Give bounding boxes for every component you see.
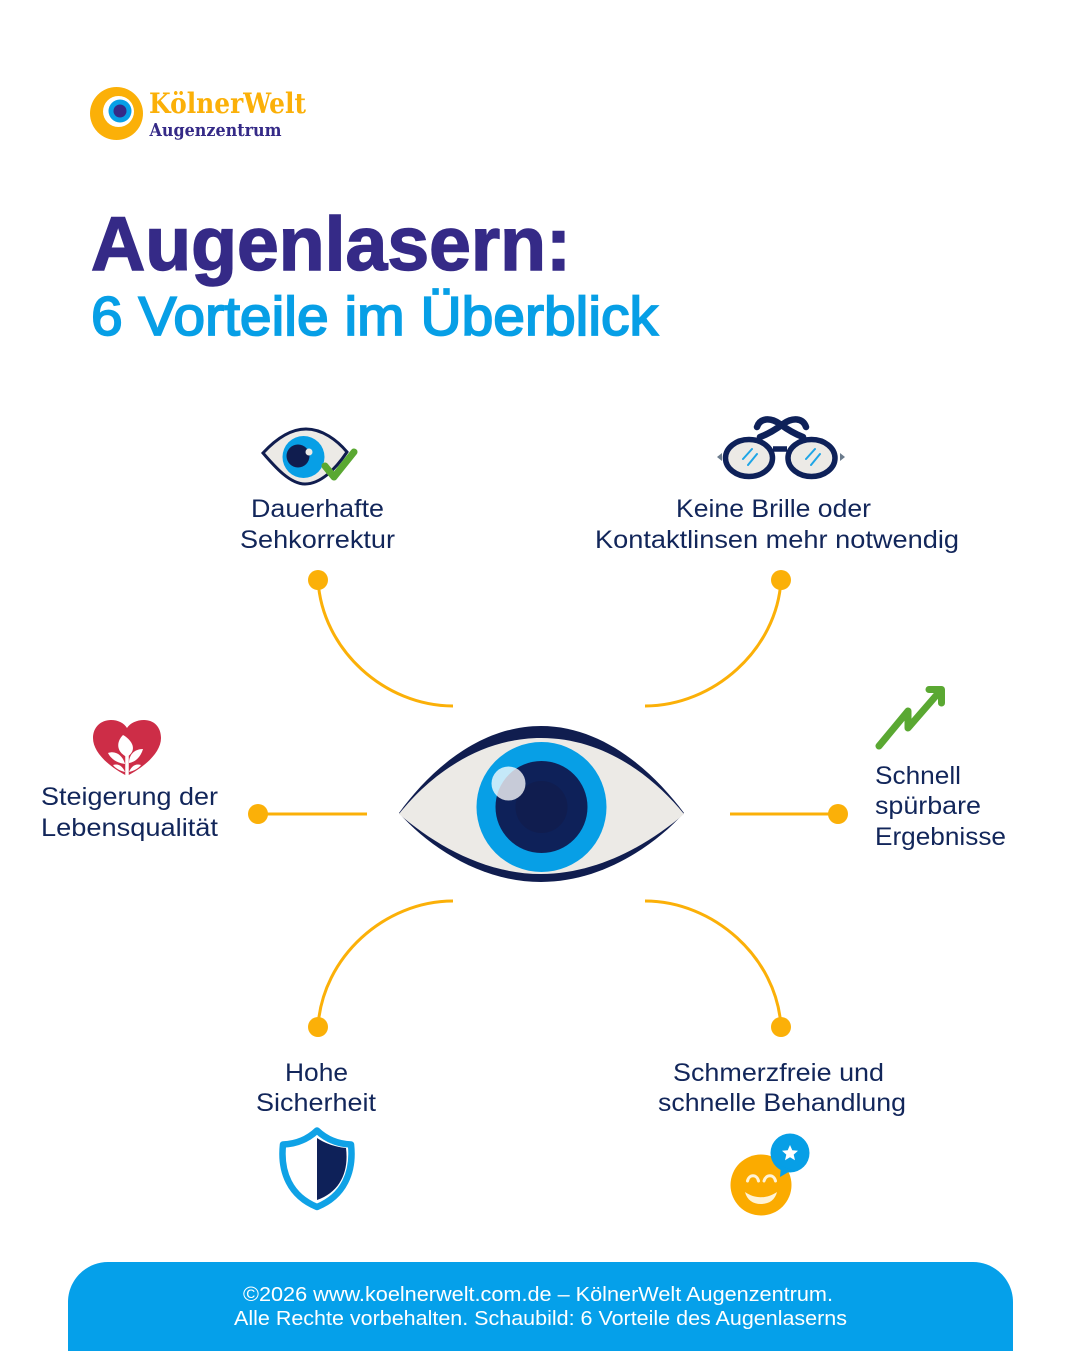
icon: shield bbox=[282, 1130, 352, 1207]
label: Hohe Sicherheit: Hohe bbox=[285, 1059, 348, 1087]
label: Steigerung der Lebensqualität: Lebensqualität bbox=[41, 814, 218, 842]
label: Dauerhafte Sehkorrektur bbox=[240, 495, 395, 554]
label: Schmerzfreie und schnelle Behandlung: Schmerzfreie und bbox=[673, 1059, 884, 1087]
connector: left bbox=[248, 804, 367, 824]
connector: bottom right bbox=[645, 901, 791, 1037]
label: Schnell spürbare Ergebnisse bbox=[875, 762, 1006, 851]
connector: top right bbox=[645, 570, 791, 706]
label: Hohe Sicherheit: Sicherheit bbox=[256, 1089, 376, 1117]
subtitle: 6 Vorteile im Überblick bbox=[91, 285, 659, 347]
label: Schmerzfreie und schnelle Behandlung bbox=[658, 1059, 906, 1117]
label: Schnell spürbare Ergebnisse: Schnell bbox=[875, 762, 961, 790]
footer text: ©2026 www.koelnerwelt.com.de – KölnerWelt Augenzentrum. bbox=[243, 1284, 833, 1306]
icon: eye with check mark bbox=[263, 429, 354, 484]
connector: top left bbox=[308, 570, 453, 706]
footer text: Alle Rechte vorbehalten. Schaubild: 6 Vorteile des Augenlaserns bbox=[234, 1308, 847, 1330]
label: Steigerung der Lebensqualität: Steigerung der bbox=[41, 783, 218, 811]
title: Augenlasern: bbox=[91, 202, 571, 287]
icon: smiley with star bubble bbox=[730, 1134, 810, 1216]
central eye illustration bbox=[399, 726, 684, 882]
logo mark bbox=[90, 87, 143, 140]
label: Keine Brille oder Kontaktlinsen: Kontaktlinsen mehr notwendig bbox=[595, 526, 959, 554]
icon: heart with plant bbox=[93, 720, 161, 776]
icon: glasses bbox=[717, 419, 845, 476]
logo name: KölnerWelt bbox=[149, 87, 306, 120]
footer bar bbox=[68, 1262, 1013, 1351]
connector: bottom left bbox=[308, 901, 453, 1037]
label: Dauerhafte Sehkorrektur: Sehkorrektur bbox=[240, 526, 395, 554]
icon: rising green arrow bbox=[879, 690, 942, 746]
label: Schnell spürbare Ergebnisse: spürbare bbox=[875, 792, 981, 820]
connector: right bbox=[730, 804, 848, 824]
logo: KölnerWelt Augenzentrum bbox=[90, 87, 306, 141]
label: Keine Brille oder Kontaktlinsen bbox=[595, 495, 959, 554]
footer text bbox=[234, 1284, 847, 1330]
logo subtitle: Augenzentrum bbox=[149, 120, 282, 141]
label: Schmerzfreie und schnelle Behandlung: schnelle Behandlung bbox=[658, 1089, 906, 1117]
label: Dauerhafte Sehkorrektur: Dauerhafte bbox=[251, 495, 384, 523]
label: Steigerung der Lebensqualität bbox=[41, 783, 218, 842]
label: Hohe Sicherheit bbox=[256, 1059, 376, 1117]
label: Schnell spürbare Ergebnisse: Ergebnisse bbox=[875, 823, 1006, 851]
label: Keine Brille oder Kontaktlinsen: Keine Brille oder bbox=[676, 495, 871, 523]
